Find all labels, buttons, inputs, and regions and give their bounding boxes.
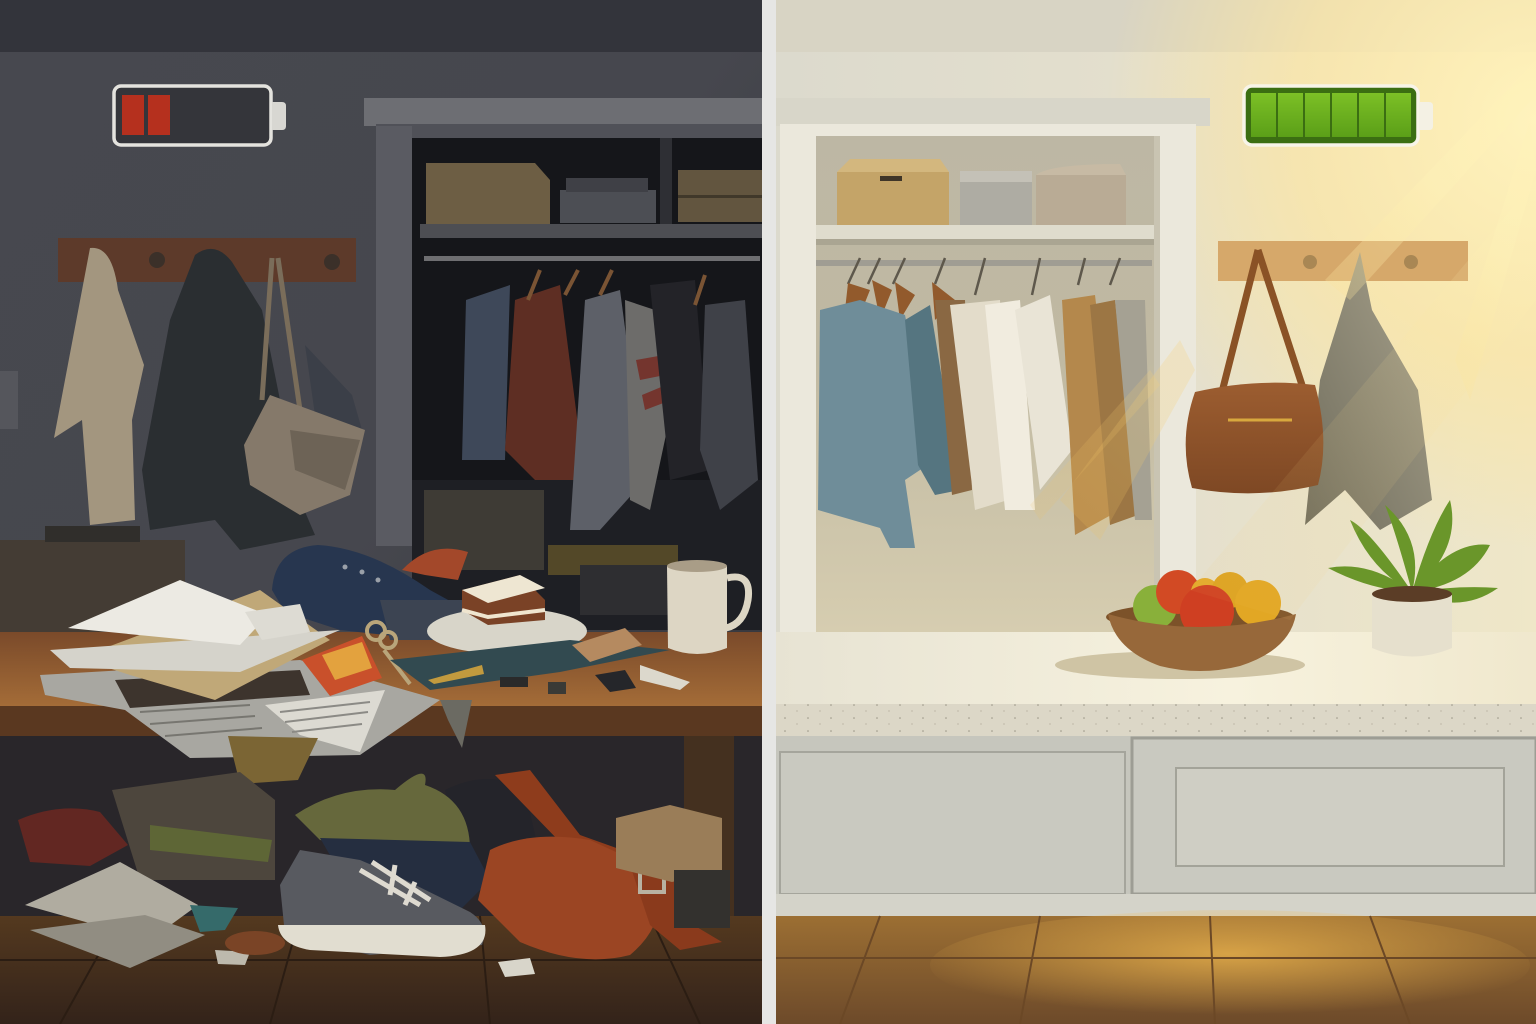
cardboard boxes by bag [616, 805, 730, 928]
counter speckled edge [776, 704, 1536, 736]
center divider [762, 0, 776, 1024]
light switch [0, 371, 18, 429]
panel: tidy right room [776, 0, 1536, 1024]
icon: low battery [114, 86, 286, 145]
left closet hanging clothes [462, 270, 758, 530]
cabinet [776, 736, 1536, 916]
left closet frame [364, 98, 762, 630]
right ceiling band [776, 0, 1536, 52]
icon: full battery [1244, 86, 1433, 145]
under counter shadow [0, 736, 762, 920]
right closet frame [776, 98, 1210, 634]
hanging grey coat [1305, 252, 1432, 530]
left stacked boxes on counter [0, 526, 185, 632]
grey sneaker [278, 850, 485, 957]
messy counter top [0, 632, 762, 708]
right wall peg rail [1218, 241, 1468, 281]
left closet boxes [426, 163, 762, 224]
right floor [776, 910, 1536, 1024]
panel: cluttered left room [0, 0, 762, 1024]
teal mat with notebook [390, 628, 670, 690]
papers on floor [25, 862, 535, 977]
under counter cabinet post [684, 736, 734, 916]
tidy counter [776, 632, 1536, 706]
blue backpack on counter [272, 545, 470, 640]
brown handbag [1186, 250, 1323, 493]
sunlight glow on wall [1100, 0, 1536, 640]
left floor [0, 916, 762, 1024]
under counter pile boxes [18, 772, 275, 880]
right hanging shirts [818, 258, 1152, 548]
white coffee mug [667, 560, 749, 654]
keys on counter [367, 622, 410, 684]
left wall [0, 0, 762, 1024]
right wall [776, 0, 1536, 1024]
hanging beige towel [54, 248, 144, 525]
hanging grey bag [244, 258, 365, 515]
counter small items [428, 665, 690, 748]
left lower closet boxes [424, 490, 690, 615]
sun rays [1030, 60, 1536, 620]
green backpack pile [295, 774, 545, 910]
right closet boxes [837, 159, 1126, 225]
left ceiling band [0, 0, 762, 52]
paper pile [40, 580, 440, 758]
fallen yellow paper [228, 736, 318, 784]
left wall peg rail [58, 238, 356, 282]
potted plant [1328, 500, 1498, 656]
fruit bowl [1055, 570, 1305, 679]
hanging dark coat [142, 249, 315, 550]
red leather duffel bag [478, 770, 722, 959]
plate with cake [427, 575, 587, 654]
counter front edge [0, 706, 762, 736]
